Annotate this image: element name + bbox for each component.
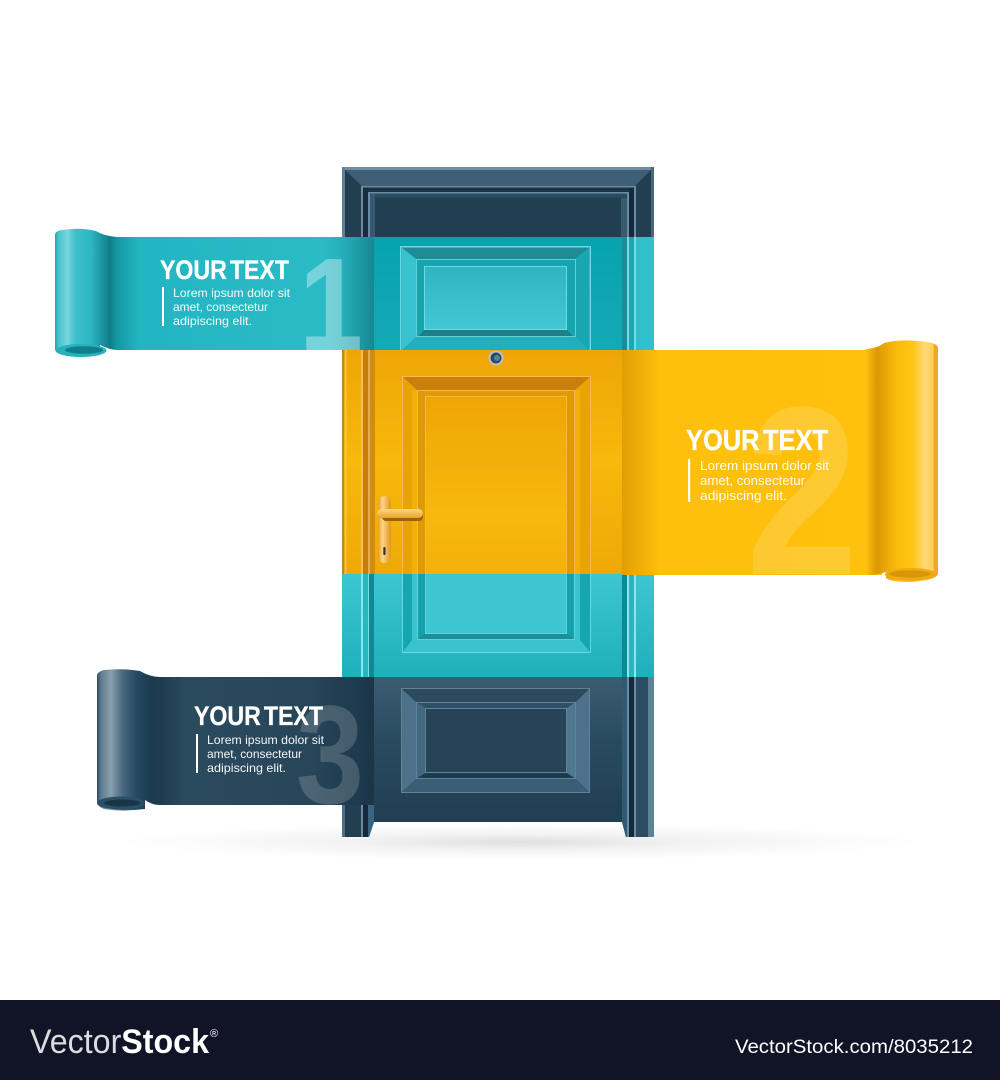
panel: large door panel, teal part	[402, 574, 591, 653]
ribbon roll 3	[97, 669, 160, 810]
panel: large door panel, yellow part	[402, 376, 591, 574]
heading 1: YOUR TEXT	[160, 255, 289, 285]
body text 3: adipiscing elit.	[207, 761, 286, 775]
door top dark section	[342, 167, 654, 237]
ribbon roll 1	[55, 229, 118, 357]
banner 1: teal	[55, 228, 374, 357]
divider bar 1	[162, 287, 164, 326]
ribbon band 1	[118, 237, 374, 350]
heading 2: YOUR TEXT	[686, 425, 828, 457]
banner 2: yellow	[622, 340, 938, 582]
door yellow section	[342, 350, 622, 574]
body text 2: amet, consectetur	[700, 474, 805, 488]
body text 1: amet, consectetur	[173, 300, 268, 314]
door	[342, 167, 654, 837]
door teal middle section	[342, 574, 654, 677]
logo wordmark: VectorStock	[30, 1023, 209, 1061]
body text 3: amet, consectetur	[207, 747, 302, 761]
registered mark: ®	[210, 1028, 218, 1040]
image id: VectorStock.com/8035212	[735, 1037, 973, 1058]
number 2: 2	[746, 357, 858, 625]
door teal upper section	[374, 237, 654, 352]
number 1: 1	[299, 231, 363, 378]
body text 2: Lorem ipsum dolor sit	[700, 459, 830, 473]
panel: lower dark	[401, 688, 590, 793]
floor shadow	[120, 824, 920, 860]
body text 1: adipiscing elit.	[173, 314, 252, 328]
number 3: 3	[296, 676, 364, 833]
divider bar 3	[196, 734, 198, 773]
icon: door handle	[377, 496, 423, 563]
door dark bottom section	[342, 677, 654, 837]
watermark bar	[0, 1000, 1000, 1080]
body text 2: adipiscing elit.	[700, 489, 787, 503]
icon: peephole	[488, 350, 504, 366]
body text 3: Lorem ipsum dolor sit	[207, 733, 325, 747]
ribbon band 2	[622, 350, 882, 575]
body text 1: Lorem ipsum dolor sit	[173, 286, 291, 300]
banner 3: dark	[97, 669, 374, 810]
ribbon roll 2	[866, 340, 938, 582]
heading 3: YOUR TEXT	[194, 701, 323, 731]
ribbon band 3	[160, 677, 374, 805]
divider bar 2	[688, 459, 690, 502]
panel: upper teal	[400, 246, 591, 352]
